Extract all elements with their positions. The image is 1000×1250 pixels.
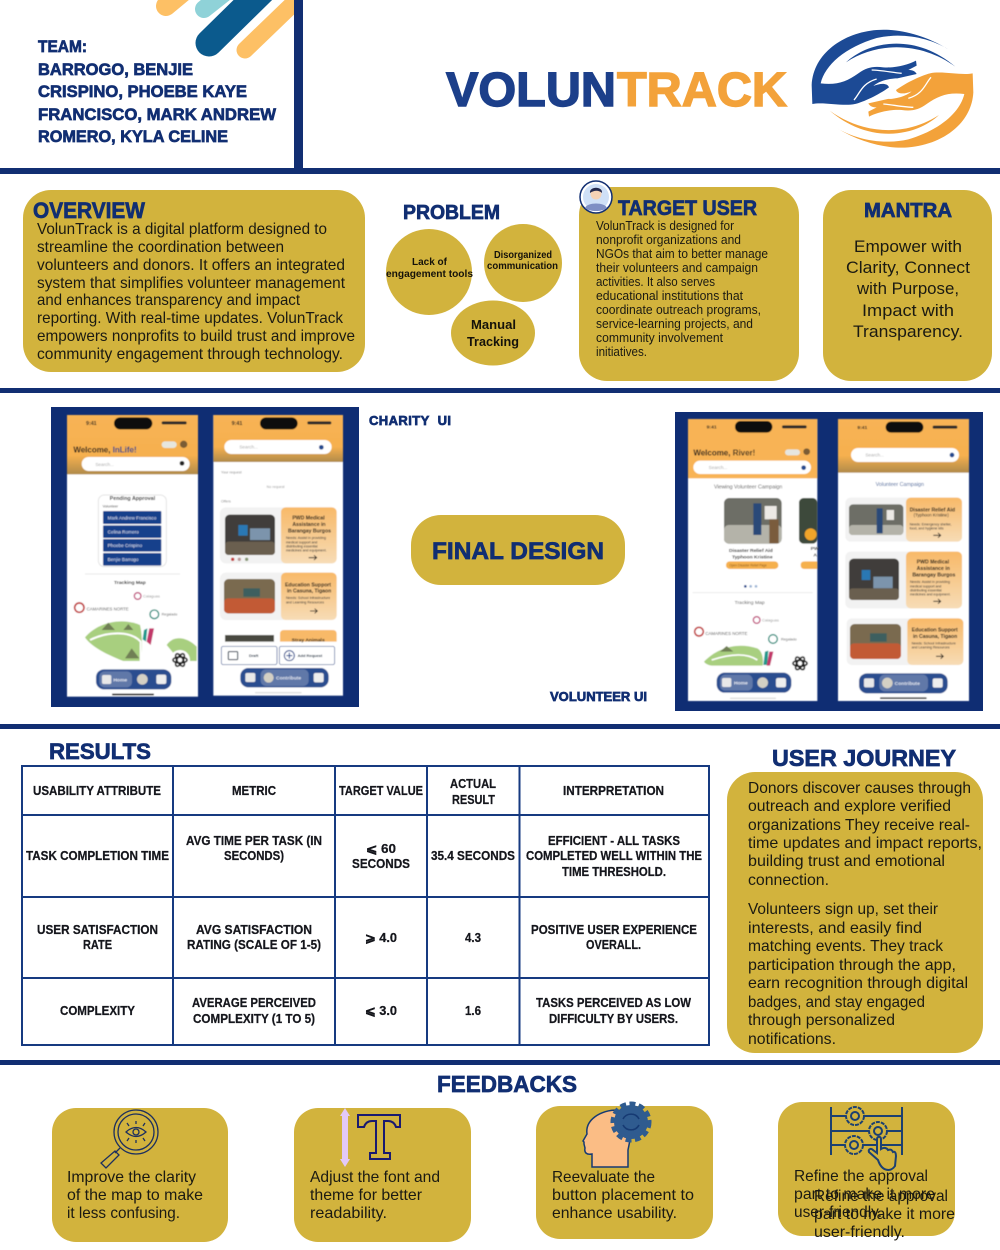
volunteers text: Volunteers sign up, set their — [748, 901, 939, 918]
volunteers text: participation through the app, — [748, 957, 956, 974]
phone: volunteer campaigns: Barangay Burgos — [912, 572, 955, 578]
table row: user satisfaction rate: RATING (SCALE OF 1-5) — [187, 938, 321, 952]
phone: volunteer campaigns: Needs: School Infrastructure — [912, 641, 956, 645]
table row: task completion time: TIME THRESHOLD. — [562, 865, 666, 879]
phone: volunteer campaigns: Assistance in — [917, 566, 950, 572]
phone: charity requests: 9:41 — [232, 421, 242, 427]
icon: VolunTrack helping-hands logo — [812, 30, 973, 148]
table row: complexity: ⩽ 3.0 — [365, 1004, 397, 1018]
problem: lack of engagement tools — [386, 229, 473, 315]
phone: volunteer campaigns: 9:41 — [857, 425, 868, 431]
icon: serif T — [358, 1115, 400, 1159]
overview text: VolunTrack is a digital platform designed to — [37, 221, 327, 238]
heading: mantra: MANTRA — [864, 200, 952, 222]
phone: charity requests: Add Request — [298, 653, 323, 658]
mantra text: Transparency. — [853, 322, 963, 341]
section divider — [0, 168, 1000, 174]
heading: results: RESULTS — [49, 739, 151, 764]
phone: charity home: Celina Romero — [108, 529, 139, 534]
problem: disorganized communication: communication — [487, 261, 558, 272]
table row: user satisfaction rate: AVG SATISFACTION — [196, 923, 312, 937]
phone: volunteer home: Typhoon Kristine — [732, 554, 773, 560]
phone: charity requests: Contribute — [276, 676, 301, 682]
feedback text: Improve the clarity — [67, 1169, 196, 1186]
overview text — [37, 221, 355, 363]
phone: volunteer home — [688, 419, 819, 701]
heading: final design pill: FINAL DESIGN — [432, 538, 604, 565]
title: VolunTrack wordmark: VOLUN — [446, 64, 616, 117]
team credits: ROMERO, KYLA CELINE — [38, 127, 228, 146]
phone: volunteer campaigns: Search... — [865, 453, 884, 458]
overview text: volunteers and donors. It offers an integrated — [37, 257, 345, 274]
feedback text: readability. — [310, 1205, 387, 1222]
table header row — [33, 777, 664, 807]
panel: feedback approval — [778, 1102, 955, 1241]
overview text: streamline the coordination between — [37, 239, 284, 256]
phone: charity requests: Stray Animals — [292, 637, 325, 643]
phone: charity home: Volunteer — [103, 505, 119, 509]
mantra text — [846, 237, 970, 341]
feedback text: button placement to — [552, 1187, 694, 1204]
phone: charity requests — [213, 415, 343, 696]
donors text: organizations They receive real- — [748, 817, 970, 834]
team credits: FRANCISCO, MARK ANDREW — [38, 105, 277, 124]
feedback text — [310, 1169, 440, 1222]
phone: charity home: Benjie Barrogo — [108, 557, 139, 562]
phone: volunteer home: PW — [811, 546, 819, 552]
phone: volunteer home: Open Disaster Relief Page — [729, 563, 767, 567]
phone: volunteer campaigns: Needs: Assist in providing — [910, 580, 950, 584]
mantra text: Empower with — [854, 237, 962, 256]
phone: charity home — [67, 415, 198, 697]
section divider — [0, 724, 1000, 729]
target user text: educational institutions that — [596, 288, 743, 303]
volunteers text — [748, 901, 968, 1048]
feedback text overlapping duplicate: part to make it more — [814, 1206, 955, 1223]
phone: charity requests: Education Support — [285, 582, 331, 588]
table row: task completion time: EFFICIENT - ALL TASKS — [548, 834, 680, 848]
donors text — [748, 780, 982, 889]
phone: volunteer home: Search... — [709, 465, 727, 470]
feedback text: it less confusing. — [67, 1205, 180, 1222]
phone: volunteer home: Calaguas — [762, 617, 779, 622]
problem: disorganized communication: Disorganized — [494, 250, 552, 261]
feedback text — [552, 1169, 694, 1222]
phone: charity requests: medicines and equipment. — [286, 549, 327, 553]
problem: manual tracking: Manual — [471, 317, 516, 332]
table row: task completion time: TASK COMPLETION TIME — [26, 849, 169, 863]
phone: charity requests: Barangay Burgos — [288, 528, 331, 534]
feedback text overlapping duplicate — [814, 1188, 955, 1241]
feedback text: Adjust the font and — [310, 1169, 440, 1186]
phone: charity home: Tracking Map — [114, 580, 146, 586]
table row: complexity: COMPLEXITY (1 TO 5) — [193, 1012, 315, 1026]
phone: charity requests: Offers — [221, 500, 231, 504]
table row: complexity: AVERAGE PERCEIVED — [192, 996, 316, 1010]
panel: problem — [386, 202, 562, 366]
panel: target user — [579, 181, 799, 381]
table row: task completion time: ⩽ 60 — [366, 842, 396, 856]
table row: user satisfaction rate: USER SATISFACTION — [37, 923, 158, 937]
phone: volunteer campaigns: distributing essential — [910, 588, 942, 592]
table header row: TARGET VALUE — [339, 784, 423, 798]
donors text: outreach and explore verified — [748, 798, 951, 815]
section divider — [0, 388, 1000, 393]
target user text: initiatives. — [596, 344, 647, 359]
target user text: coordinate outreach programs, — [596, 302, 761, 317]
problem: lack of engagement tools: Lack of — [412, 256, 447, 268]
decorative header stripes — [166, 0, 300, 50]
table row: user satisfaction rate: RATE — [83, 938, 112, 952]
phone: volunteer campaigns — [838, 419, 969, 701]
table header row: METRIC — [232, 784, 276, 798]
heading: user journey: USER JOURNEY — [772, 745, 956, 771]
table row: task completion time: SECONDS) — [224, 849, 284, 863]
table header row: ACTUAL — [450, 777, 496, 791]
phone: volunteer campaigns: and Learning Resources — [912, 646, 950, 650]
phone: volunteer campaigns: Contribute — [895, 681, 920, 687]
team credits: BARROGO, BENJIE — [38, 60, 193, 79]
phone: charity home: 9:41 — [86, 421, 97, 427]
phone: volunteer home: Welcome, River! — [693, 449, 755, 458]
table row: complexity: 1.6 — [465, 1004, 481, 1018]
phone: volunteer campaigns: medicines and equipment. — [910, 593, 951, 597]
panel: volunteer UI screens — [675, 412, 983, 711]
team credits: CRISPINO, PHOEBE KAYE — [38, 82, 247, 101]
heading: problem: PROBLEM — [403, 202, 500, 224]
table header row: USABILITY ATTRIBUTE — [33, 784, 161, 798]
phone: volunteer home: Tracking Map — [735, 600, 765, 606]
phone: volunteer campaigns: Disaster Relief Aid — [910, 508, 955, 514]
target user text: their volunteers and campaign — [596, 260, 758, 275]
section divider — [0, 1060, 1000, 1065]
volunteers text: through personalized — [748, 1012, 895, 1029]
panel: feedback button placement — [536, 1104, 713, 1239]
phone: volunteer campaigns: medical support and — [910, 584, 941, 588]
results table — [22, 766, 709, 1045]
phone: charity requests: No request — [267, 485, 285, 489]
table header row: RESULT — [452, 793, 495, 807]
phone: charity requests: medical support and — [286, 540, 317, 544]
phone: volunteer home: 9:41 — [707, 424, 717, 430]
mantra text: Impact with — [862, 301, 954, 320]
table row: user satisfaction rate: POSITIVE USER EXPERIENCE — [531, 923, 697, 937]
table row: task completion time: SECONDS — [352, 857, 410, 871]
overview text: system that simplifies volunteer management — [37, 275, 346, 292]
target user text: VolunTrack is designed for — [596, 218, 735, 233]
table row: user satisfaction rate: 4.3 — [465, 931, 481, 945]
panel: feedback font theme — [294, 1108, 471, 1242]
phone: volunteer campaigns: Education Support — [912, 628, 958, 634]
volunteers text: matching events. They track — [748, 938, 944, 955]
table header row: INTERPRETATION — [563, 784, 664, 798]
phone: charity requests: Search... — [239, 445, 258, 450]
heading: final design pill — [411, 515, 625, 585]
phone: volunteer home: CAMARINES NORTE — [705, 631, 747, 636]
phone: charity requests: Assistance in — [292, 522, 326, 528]
icon: head with gear — [583, 1104, 650, 1167]
target user text: community involvement — [596, 330, 723, 345]
phone: charity home: Mark Andrew Francisco — [108, 515, 157, 520]
title: VolunTrack wordmark — [446, 64, 787, 117]
phone: charity home: Regalado — [162, 613, 177, 617]
target user text: service-learning projects, and — [596, 316, 753, 331]
phone: charity requests: in Casuna, Tigaon — [287, 589, 331, 595]
volunteers text: interests, and easily find — [748, 920, 922, 937]
label: charity UI: CHARITY UI — [369, 413, 451, 428]
team credits — [38, 37, 277, 146]
target user text: NGOs that aim to better manage — [596, 246, 768, 261]
phone: charity requests: and Learning Resources — [286, 601, 324, 605]
phone: charity requests: Needs: Assist in providing — [286, 536, 326, 540]
table row: complexity: DIFFICULTY BY USERS. — [549, 1012, 678, 1026]
phone: charity home: Calaguas — [143, 594, 160, 599]
panel: mantra — [823, 190, 992, 381]
donors text: building trust and emotional — [748, 853, 945, 870]
phone: charity requests: PWD Medical — [292, 516, 325, 522]
phone: volunteer campaigns: Needs: Emergency shelter, — [910, 522, 952, 526]
panel: overview — [23, 190, 365, 372]
panel: charity UI screens — [51, 407, 359, 707]
phone: charity home: Welcome, InLife! — [73, 445, 137, 454]
heading: overview: OVERVIEW — [33, 198, 145, 223]
donors text: Donors discover causes through — [748, 780, 971, 797]
problem: manual tracking — [451, 300, 535, 366]
feedback text: Reevaluate the — [552, 1169, 655, 1186]
phone: volunteer campaigns: PWD Medical — [917, 560, 950, 566]
problem: manual tracking: Tracking — [467, 334, 519, 349]
volunteers text: notifications. — [748, 1031, 836, 1048]
overview text: community engagement through technology. — [37, 346, 343, 363]
table row: user satisfaction rate — [37, 923, 697, 952]
target user text: nonprofit organizations and — [596, 232, 741, 247]
feedback text — [67, 1169, 203, 1222]
phone: charity requests: Your request — [221, 470, 242, 474]
phone: volunteer home: Home — [734, 680, 748, 686]
table row: task completion time: AVG TIME PER TASK (IN — [186, 834, 322, 848]
table row: user satisfaction rate: ⩾ 4.0 — [365, 931, 397, 945]
overview text: reporting. With real-time updates. VolunTrack — [37, 310, 344, 327]
feedback text: part to make it more — [794, 1186, 935, 1203]
heading: feedbacks: FEEDBACKS — [437, 1071, 577, 1097]
phone: charity home: Search... — [95, 462, 114, 467]
phone: charity home: Home — [113, 677, 127, 683]
target user text — [596, 218, 768, 359]
icon: gear sliders with hand — [831, 1107, 902, 1170]
mantra text: with Purpose, — [856, 279, 959, 298]
icon: height arrow — [340, 1108, 350, 1167]
phone: charity home: Pending Approval — [110, 496, 156, 502]
feedback text: enhance usability. — [552, 1205, 677, 1222]
header divider — [294, 0, 303, 170]
feedback text overlapping duplicate: user-friendly. — [814, 1224, 905, 1241]
heading: target user: TARGET USER — [618, 197, 757, 220]
target user text: activities. It also serves — [596, 274, 715, 289]
table row: task completion time — [26, 834, 702, 879]
phone: volunteer home: A — [813, 553, 817, 559]
phone: volunteer campaigns: Volunteer Campaign — [876, 482, 924, 488]
overview text: and enhances transparency and impact — [37, 292, 301, 309]
table row: task completion time: COMPLETED WELL WITHIN THE — [526, 849, 702, 863]
feedback text overlapping duplicate: Refine the approval — [814, 1188, 948, 1205]
mantra text: Clarity, Connect — [846, 258, 970, 277]
label: volunteer UI: VOLUNTEER UI — [550, 689, 647, 704]
phone: charity requests: Draft — [249, 653, 259, 658]
table row: user satisfaction rate: OVERALL. — [586, 938, 641, 952]
phone: charity requests: Needs: School Infrastructure — [286, 596, 330, 600]
table row: complexity: COMPLEXITY — [60, 1004, 136, 1018]
panel: user journey — [727, 772, 983, 1053]
phone: charity home: CAMARINES NORTE — [87, 607, 129, 612]
table row: task completion time: 35.4 SECONDS — [431, 849, 515, 863]
feedback text: theme for better — [310, 1187, 423, 1204]
feedback text: user-friendly. — [794, 1204, 882, 1221]
icon: user avatar — [580, 181, 612, 213]
phone: volunteer campaigns: food, and hygiene kits — [910, 527, 944, 531]
feedback text: Refine the approval — [794, 1168, 928, 1185]
problem: disorganized communication — [484, 224, 562, 302]
phone: volunteer home: Viewing Volunteer Campaign — [714, 485, 782, 491]
phone: charity requests: distributing essential — [286, 544, 318, 548]
volunteers text: badges, and stay engaged — [748, 994, 925, 1011]
phone: volunteer home: Disaster Relief Aid — [729, 548, 773, 554]
feedback text: of the map to make — [67, 1187, 203, 1204]
overview text: empowers nonprofits to build trust and improve — [37, 328, 355, 345]
problem: lack of engagement tools: engagement tools — [386, 268, 473, 280]
phone: volunteer campaigns: in Casuna, Tigaon — [913, 634, 957, 640]
table row: complexity: TASKS PERCEIVED AS LOW — [536, 996, 691, 1010]
icon: magnifier with eye — [101, 1110, 158, 1168]
donors text: connection. — [748, 872, 829, 889]
table row: complexity — [60, 996, 691, 1026]
team credits: TEAM: — [38, 37, 87, 56]
volunteers text: earn recognition through digital — [748, 975, 968, 992]
phone: volunteer campaigns: (Typhoon Kristine) — [914, 512, 949, 517]
phone: volunteer home: Regalado — [781, 637, 797, 641]
feedback text — [794, 1168, 935, 1221]
donors text: time updates and impact reports, — [748, 835, 982, 852]
phone: charity home: Phoebe Crispino — [108, 543, 143, 548]
title: VolunTrack wordmark: TRACK — [617, 64, 787, 117]
panel: feedback map clarity — [52, 1108, 228, 1242]
